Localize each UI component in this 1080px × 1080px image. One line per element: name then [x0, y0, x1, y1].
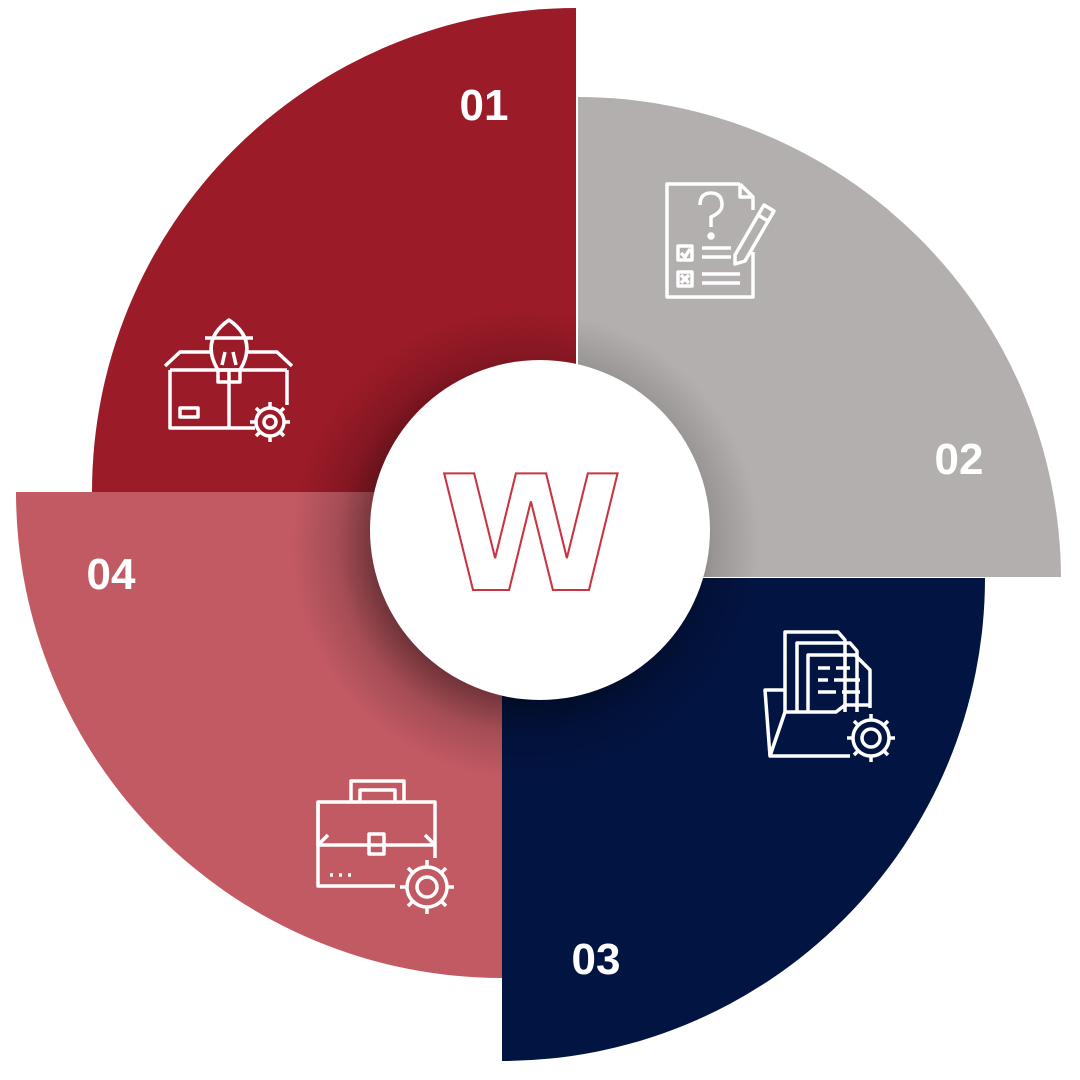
icon: questionnaire with pencil — [667, 184, 774, 297]
number 02: 02 — [935, 435, 983, 484]
quadrant 04 — [16, 492, 502, 978]
logo W: W — [439, 442, 623, 628]
icon: box with lightbulb and gear — [165, 320, 292, 442]
icon: briefcase with gear — [318, 781, 454, 914]
quadrant 02 — [578, 97, 1061, 577]
icon: folder of documents with gear — [765, 632, 895, 762]
center shadow — [304, 327, 745, 765]
quadrant 01 — [92, 8, 576, 492]
number 04: 04 — [87, 550, 136, 599]
number 01: 01 — [460, 81, 508, 130]
center circle — [370, 360, 710, 700]
number 03: 03 — [572, 935, 620, 984]
quadrant 03 — [502, 578, 985, 1061]
